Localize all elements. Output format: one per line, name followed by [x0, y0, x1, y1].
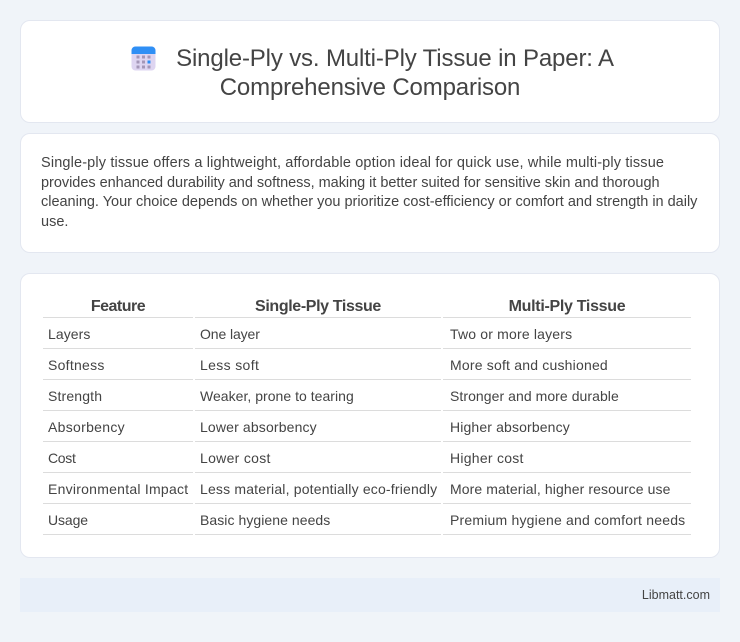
row: Absorbency: [48, 419, 570, 435]
row: Usage: Basic hygiene needs: [200, 512, 330, 528]
row: Environmental Impact: More material, higher resource use: [450, 481, 670, 497]
row: Strength: Weaker, prone to tearing: [200, 388, 354, 404]
row: Environmental Impact: [48, 481, 670, 497]
row: Absorbency: Lower absorbency: [200, 419, 317, 435]
description text: use.: [41, 214, 68, 230]
row: Layers: [48, 326, 572, 342]
row: Layers: One layer: [200, 326, 260, 342]
row: Usage: Usage: [48, 512, 88, 528]
description text: Single-ply tissue offers a lightweight, affordable option ideal for quick use, while multi-ply tissue: [41, 155, 664, 171]
row: Cost: [48, 450, 524, 466]
row: Strength: Stronger and more durable: [450, 388, 619, 404]
row: Layers: Two or more layers: [450, 326, 572, 342]
row: Cost: Lower cost: [200, 450, 271, 466]
panel: comparison table card: [20, 273, 720, 558]
row: Layers: Layers: [48, 326, 90, 342]
row: Softness: [48, 357, 608, 373]
row: Cost: Cost: [48, 450, 76, 466]
panel: title card: [20, 20, 720, 123]
table header: [91, 298, 626, 315]
table header: Multi-Ply Tissue: [509, 298, 625, 315]
title: [176, 45, 614, 101]
row: Strength: [48, 388, 619, 404]
icon: calendar: [132, 46, 156, 70]
title: Single-Ply vs. Multi-Ply Tissue in Paper: A: [176, 45, 614, 72]
row: Absorbency: Absorbency: [48, 419, 125, 435]
comparison table: [43, 298, 691, 535]
footer credit: Libmatt.com: [642, 588, 710, 602]
table header: Feature: [91, 298, 145, 315]
row: Environmental Impact: Less material, potentially eco-friendly: [200, 481, 437, 497]
description text: [41, 155, 698, 230]
row: Strength: Strength: [48, 388, 102, 404]
title: Comprehensive Comparison: [220, 74, 520, 101]
panel: description card: [20, 133, 720, 253]
row: Usage: Premium hygiene and comfort needs: [450, 512, 685, 528]
row: Usage: [48, 512, 685, 528]
description text: cleaning. Your choice depends on whether you prioritize cost-efficiency or comfort and strength in daily: [41, 194, 697, 210]
row: Softness: Less soft: [200, 357, 259, 373]
table header: Single-Ply Tissue: [255, 298, 381, 315]
row: Cost: Higher cost: [450, 450, 524, 466]
panel: footer: [20, 578, 720, 612]
row: Softness: Softness: [48, 357, 105, 373]
row: Softness: More soft and cushioned: [450, 357, 608, 373]
row: Absorbency: Higher absorbency: [450, 419, 570, 435]
description text: provides enhanced durability and softness, making it better suited for sensitive skin and thorough: [41, 175, 660, 191]
row: Environmental Impact: Environmental Impact: [48, 481, 188, 497]
